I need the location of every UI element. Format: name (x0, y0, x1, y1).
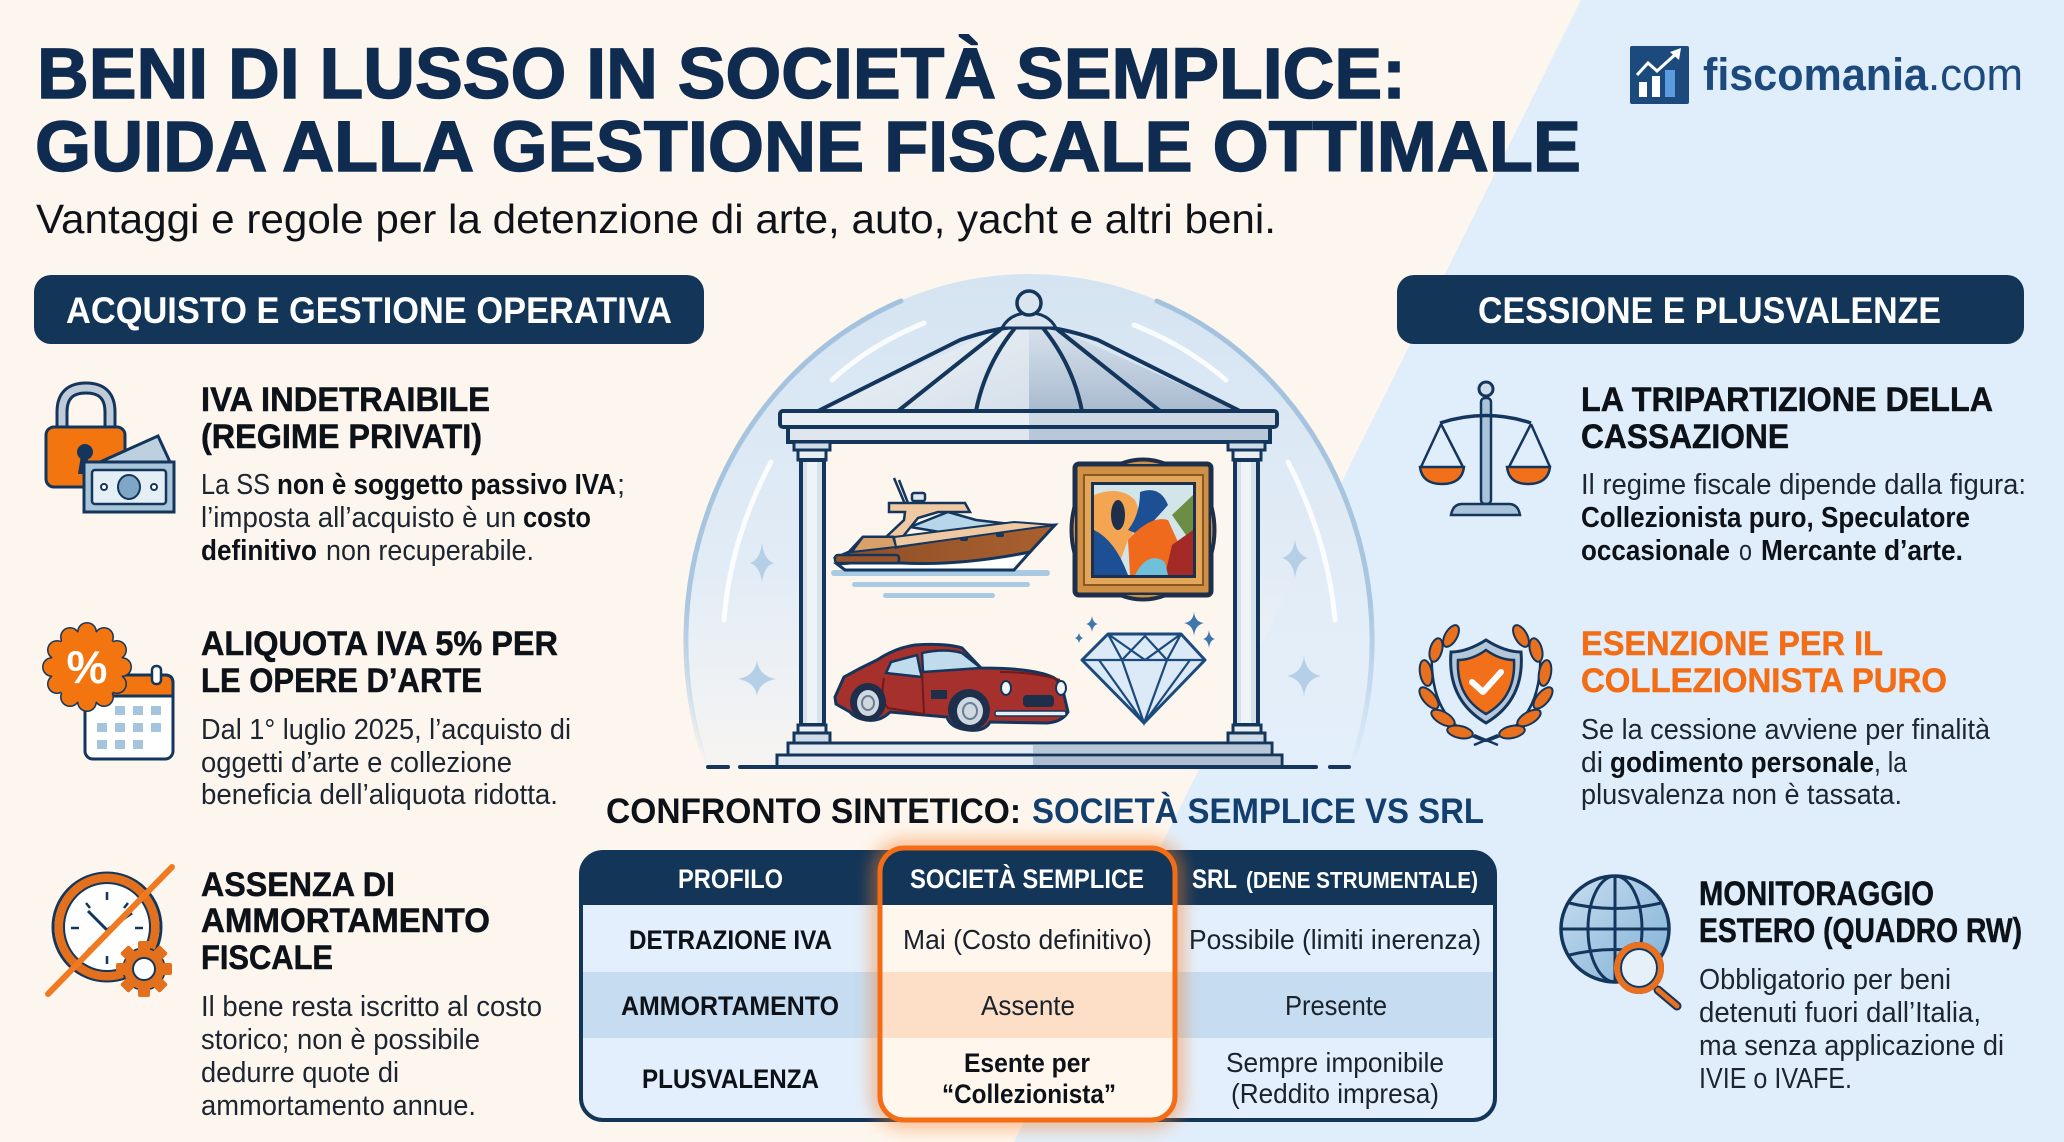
item: esenzione per il collezionista puro: ESENZIONE PER IL (1581, 625, 1883, 663)
item: monitoraggio estero (1561, 875, 2022, 1095)
heading: cessione e plusvalenze (1397, 275, 2024, 344)
item: iva indetraibile: ; (617, 469, 625, 501)
icon: globe with magnifier (1561, 876, 1677, 1006)
item: monitoraggio estero: ma senza applicazione di (1699, 1030, 2004, 1062)
icon: logo chart (1630, 46, 1689, 104)
icon: percent badge and calendar: % (67, 641, 107, 693)
item: iva indetraibile: IVA INDETRAIBILE (201, 381, 490, 419)
comparison table: Presente (1285, 990, 1387, 1021)
item: aliquota iva 5%: LE OPERE D’ARTE (201, 662, 482, 700)
item: iva indetraibile: definitivo (201, 535, 317, 567)
item: iva indetraibile: non recuperabile. (326, 535, 534, 567)
heading: acquisto e gestione operativa: ACQUISTO E GESTIONE OPERATIVA (66, 290, 672, 331)
item: assenza di ammortamento: ammortamento annue. (201, 1090, 476, 1122)
icon: padlock and cash (46, 388, 174, 512)
comparison table: Possibile (limiti inerenza) (1189, 924, 1481, 955)
item: tripartizione della cassazione (1420, 381, 2026, 567)
title (35, 35, 1581, 187)
item: esenzione per il collezionista puro: di (1581, 747, 1603, 779)
heading: confronto sintetico: CONFRONTO SINTETICO: (606, 792, 1021, 831)
item: iva indetraibile (46, 381, 625, 567)
comparison table: Esente per (964, 1048, 1090, 1078)
item: monitoraggio estero: MONITORAGGIO (1699, 875, 1934, 913)
logo: fiscomania.com (1630, 46, 2023, 104)
icon: diamond (1075, 612, 1215, 723)
item: tripartizione della cassazione: Il regime fiscale dipende dalla figura: (1581, 469, 2026, 501)
icon: crossed-out clock and gear (48, 867, 172, 997)
item: assenza di ammortamento: storico; non è possibile (201, 1024, 480, 1056)
item: tripartizione della cassazione: LA TRIPARTIZIONE DELLA (1581, 381, 1993, 419)
item: aliquota iva 5%: ALIQUOTA IVA 5% PER (201, 625, 558, 663)
glass dome (683, 274, 1375, 765)
item: esenzione per il collezionista puro: plusvalenza non è tassata. (1581, 779, 1902, 811)
item: iva indetraibile: costo (523, 502, 591, 534)
highlighted column: società semplice (880, 848, 1175, 1120)
item: assenza di ammortamento: ASSENZA DI (201, 866, 395, 904)
central illustration: glass dome with luxury goods (683, 274, 1375, 769)
logo: fiscomania.com: fiscomania (1703, 49, 1929, 100)
comparison table: (Reddito impresa) (1231, 1078, 1439, 1109)
item: tripartizione della cassazione: CASSAZIONE (1581, 418, 1789, 456)
heading: acquisto e gestione operativa (34, 275, 704, 344)
item: esenzione per il collezionista puro (1416, 623, 1991, 811)
item: esenzione per il collezionista puro: , la (1874, 747, 1908, 779)
comparison table: “Collezionista” (942, 1079, 1116, 1109)
item: assenza di ammortamento: dedurre quote di (201, 1057, 399, 1089)
comparison table: SRL (1192, 864, 1237, 894)
comparison table: DETRAZIONE IVA (629, 925, 832, 955)
comparison table (581, 848, 1495, 1120)
comparison table: PLUSVALENZA (642, 1064, 819, 1094)
icon: yacht (831, 478, 1055, 598)
item: iva indetraibile: (REGIME PRIVATI) (201, 418, 482, 456)
item: iva indetraibile: La SS (201, 469, 270, 501)
icon: scales (1420, 382, 1550, 515)
comparison table: AMMORTAMENTO (621, 991, 839, 1021)
comparison table: Mai (Costo definitivo) (903, 924, 1152, 955)
item: tripartizione della cassazione: occasionale (1581, 535, 1730, 567)
comparison table: (DENE STRUMENTALE) (1246, 867, 1478, 893)
title: BENI DI LUSSO IN SOCIETÀ SEMPLICE: (37, 35, 1406, 114)
comparison table: PROFILO (678, 864, 783, 894)
item: aliquota iva 5%: beneficia dell’aliquota ridotta. (201, 779, 558, 811)
item: aliquota iva 5% (42, 622, 571, 811)
item: tripartizione della cassazione: Collezionista puro, Speculatore (1581, 502, 1970, 534)
item: assenza di ammortamento (48, 866, 542, 1122)
item: aliquota iva 5%: Dal 1° luglio 2025, l’acquisto di (201, 714, 571, 746)
logo: fiscomania.com: .com (1928, 49, 2023, 100)
heading: confronto sintetico (606, 791, 1484, 831)
comparison table: Assente (981, 990, 1075, 1021)
item: iva indetraibile: l’imposta all’acquisto è un (201, 502, 516, 534)
icon: shield and laurel (1416, 623, 1556, 745)
item: aliquota iva 5%: oggetti d’arte e collezione (201, 747, 512, 779)
item: assenza di ammortamento: AMMORTAMENTO (201, 902, 490, 940)
icon: framed painting (1072, 460, 1214, 600)
item: esenzione per il collezionista puro: Se la cessione avviene per finalità (1581, 714, 1991, 746)
panel: cessione e plusvalenze (1416, 381, 2026, 1095)
item: esenzione per il collezionista puro: godimento personale (1610, 747, 1874, 779)
comparison table: SOCIETÀ SEMPLICE (910, 863, 1144, 894)
item: tripartizione della cassazione: o (1739, 535, 1752, 567)
heading: confronto sintetico: SOCIETÀ SEMPLICE VS SRL (1032, 791, 1484, 831)
item: monitoraggio estero: detenuti fuori dall’Italia, (1699, 997, 1981, 1029)
item: iva indetraibile: non è soggetto passivo IVA (277, 469, 616, 501)
item: assenza di ammortamento: FISCALE (201, 939, 333, 977)
pavilion (706, 291, 1351, 769)
item: monitoraggio estero: Obbligatorio per beni (1699, 964, 1951, 996)
icon: percent badge and calendar (42, 622, 173, 759)
item: esenzione per il collezionista puro: COLLEZIONISTA PURO (1581, 662, 1947, 700)
panel: acquisto e gestione (42, 381, 625, 1122)
item: assenza di ammortamento: Il bene resta iscritto al costo (201, 991, 542, 1023)
title: GUIDA ALLA GESTIONE FISCALE OTTIMALE (35, 108, 1581, 187)
subtitle: Vantaggi e regole per la detenzione di arte, auto, yacht e altri beni. (36, 196, 1276, 242)
item: tripartizione della cassazione: Mercante d’arte. (1761, 535, 1963, 567)
icon: classic red car (835, 644, 1068, 731)
item: monitoraggio estero: IVIE o IVAFE. (1699, 1063, 1852, 1095)
comparison table: Sempre imponibile (1226, 1047, 1444, 1078)
heading: cessione e plusvalenze: CESSIONE E PLUSVALENZE (1478, 290, 1941, 331)
